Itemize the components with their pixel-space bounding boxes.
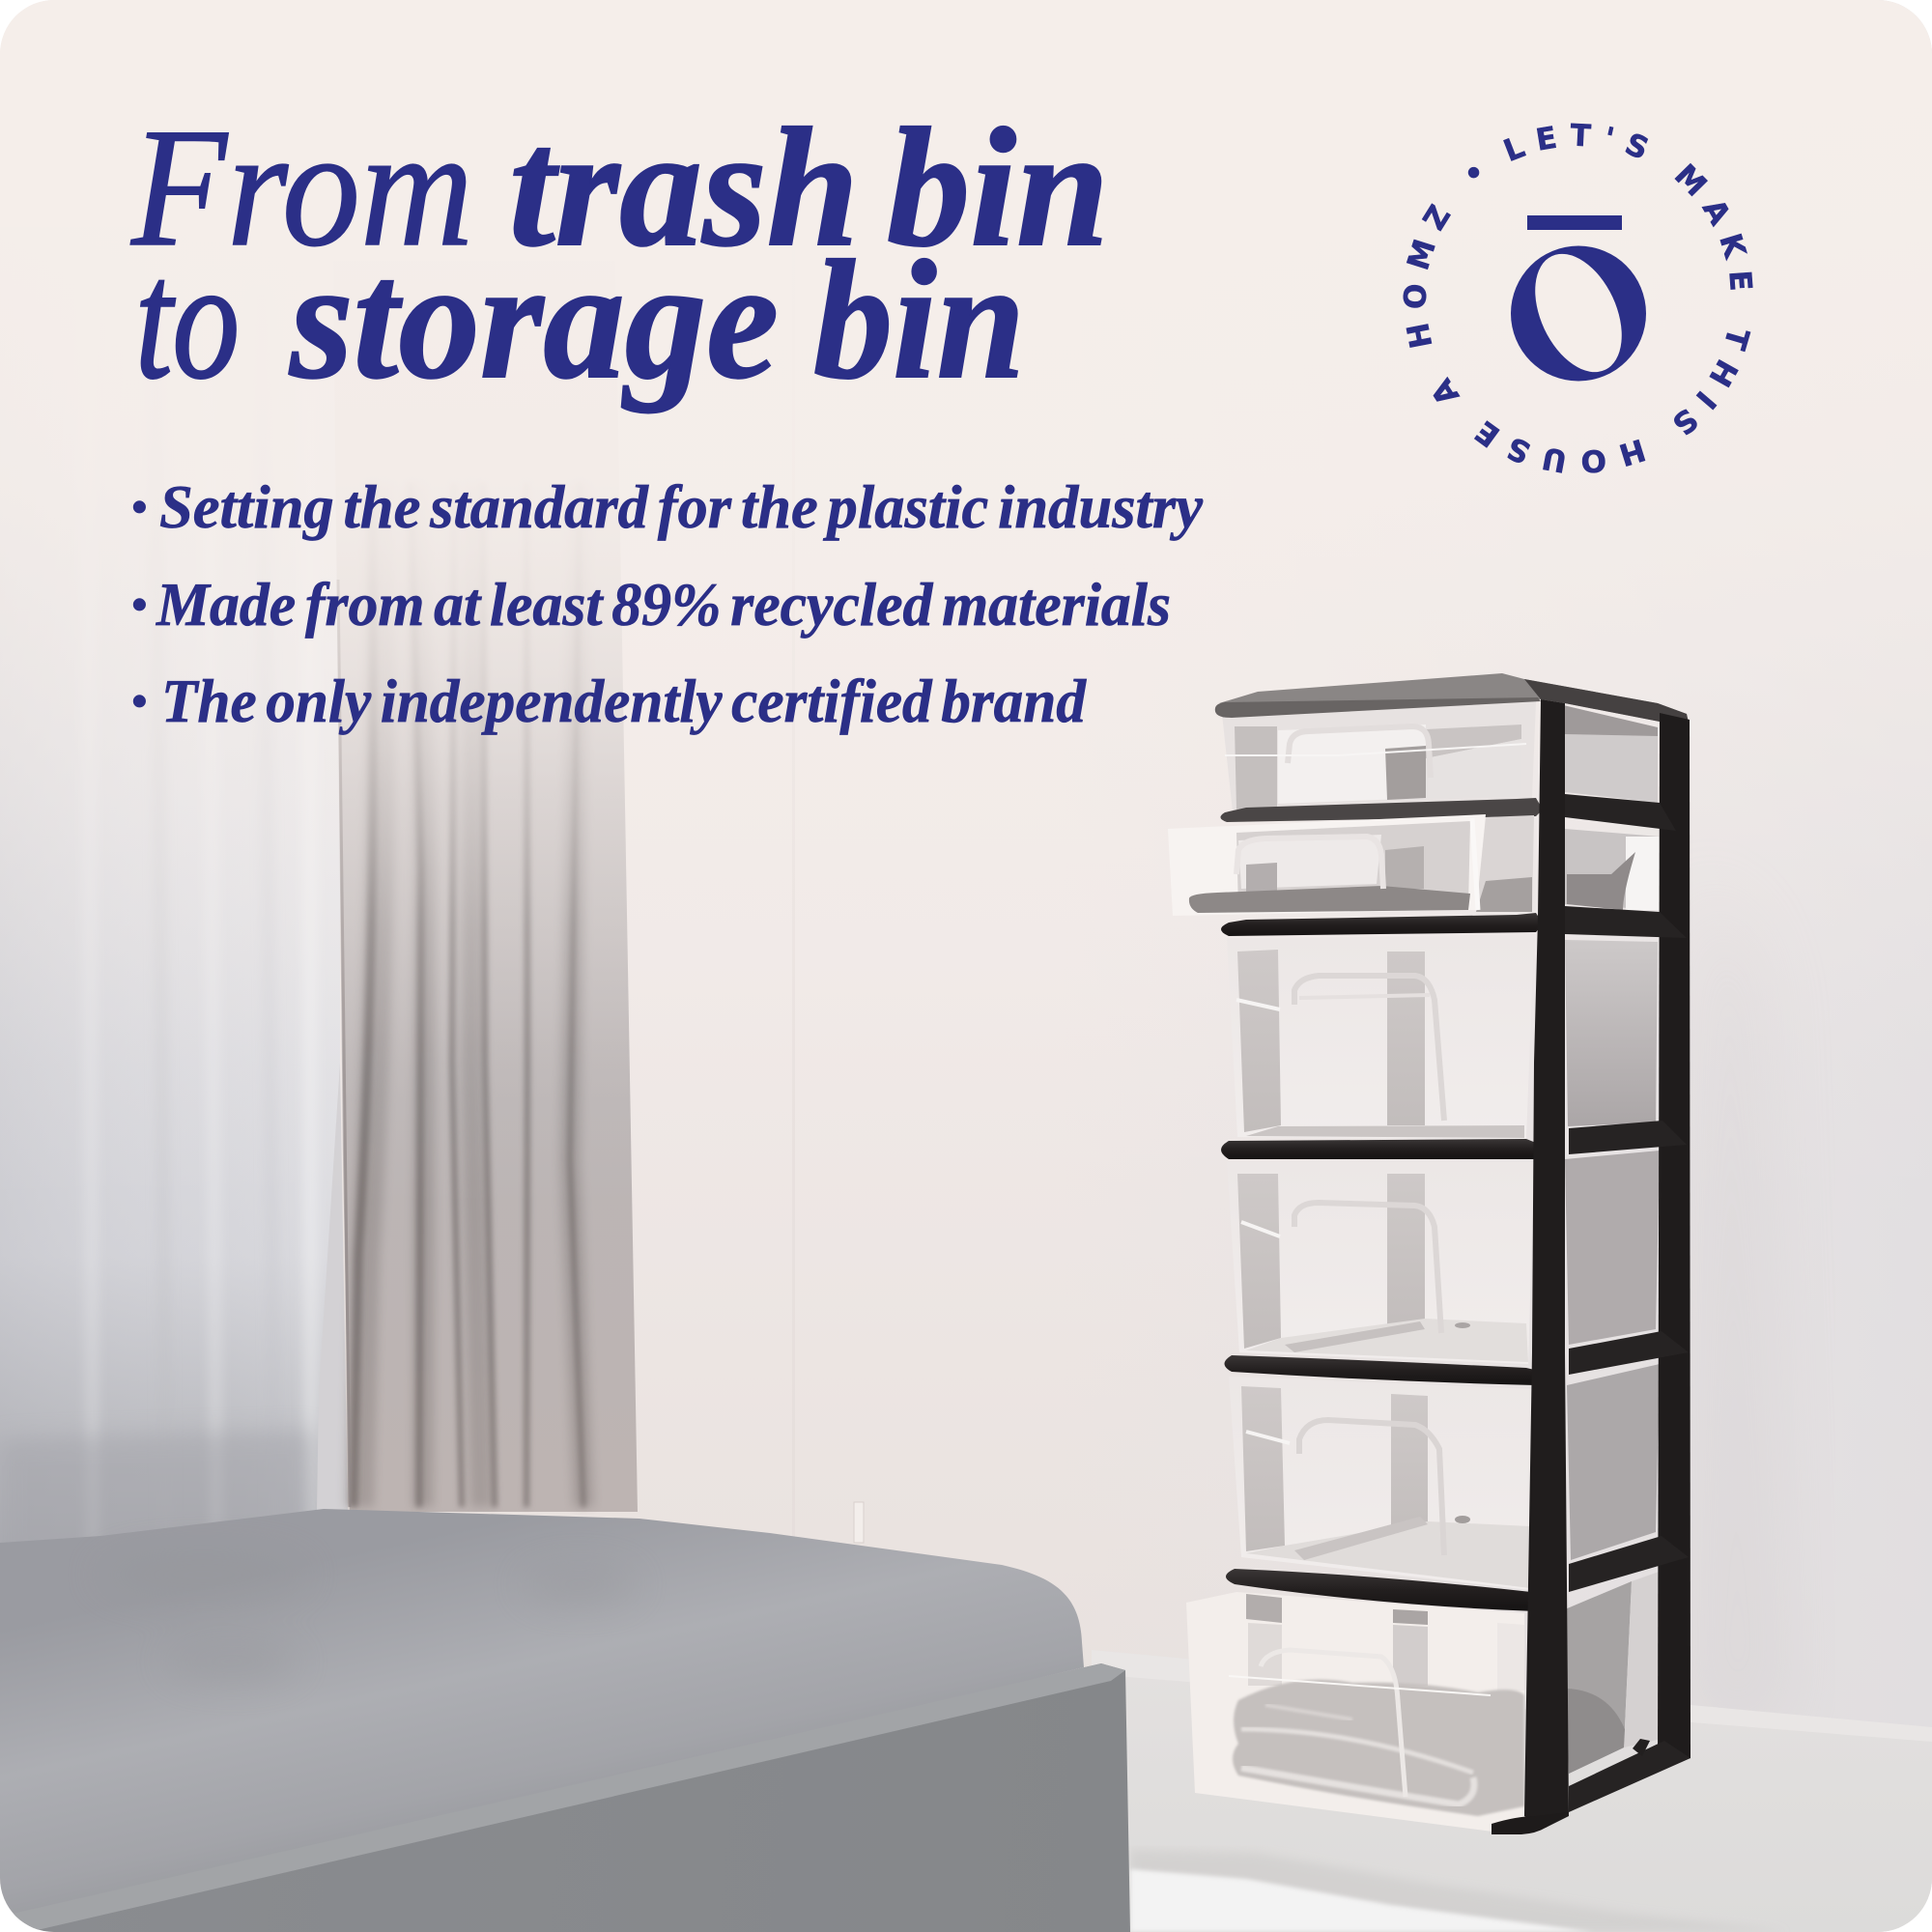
mattress <box>0 1509 1084 1922</box>
sheer white curtain <box>0 651 340 1543</box>
mattress tufts <box>97 1550 638 1679</box>
cabinet front post <box>1524 699 1569 1828</box>
title: bin <box>813 226 1025 414</box>
cabinet back post <box>1658 713 1690 1768</box>
rail under drawer 2 <box>1221 913 1543 936</box>
rail under drawer 1 <box>1220 798 1543 822</box>
drawer 4 <box>1237 1174 1530 1364</box>
circular slogan: LET'S MAKE THIS HOUSE A HOMZ • <box>1403 124 1753 473</box>
pulled-out drawer 2 <box>1168 814 1534 916</box>
bullet: certified brand: The only independently certified brand <box>161 667 1087 735</box>
top front rail <box>1215 697 1541 718</box>
title: From <box>130 94 473 282</box>
title: to <box>135 226 240 414</box>
bullet: certified brand: • <box>131 676 147 725</box>
logo bar <box>1527 215 1622 230</box>
floor with baseboard and rug <box>1128 1705 1932 1932</box>
circular badge logo <box>1403 124 1753 473</box>
cabinet top surface <box>1219 673 1689 722</box>
bed base <box>0 1663 1130 1932</box>
drawer 1 <box>1221 701 1536 811</box>
title <box>130 94 1109 414</box>
bullet list <box>131 472 1204 735</box>
logo ring <box>1511 241 1646 385</box>
rail under drawer 3 <box>1221 1139 1543 1159</box>
rail under drawer 4 <box>1225 1355 1543 1385</box>
title: trash <box>509 94 859 282</box>
folded clothes <box>1233 1680 1524 1816</box>
rail under drawer 5 <box>1226 1569 1545 1611</box>
drawer 5 <box>1229 1377 1534 1590</box>
bullet: plastic industry: Setting the standard for the plastic industry <box>159 472 1204 541</box>
drawer 3 <box>1236 950 1528 1139</box>
drawer unit <box>1168 673 1690 1834</box>
taupe curtain with folds <box>317 527 638 1513</box>
outlet on wall <box>854 1502 864 1543</box>
bullet: recycled materials: Made from at least 89% recycled materials <box>156 570 1171 639</box>
bullet: recycled materials: • <box>131 580 147 629</box>
pulled-out drawer 6 with folded clothes <box>1186 1592 1524 1832</box>
bullet: plastic industry: • <box>131 482 147 531</box>
bed <box>0 1509 1130 1932</box>
cabinet foot <box>1492 1812 1569 1834</box>
bed piping <box>0 1663 1125 1932</box>
cabinet side panels <box>1563 705 1662 1774</box>
cream wash over upper scene <box>0 0 1932 1082</box>
title: storage <box>289 226 779 414</box>
title: bin <box>887 94 1109 282</box>
cabinet side rails <box>1565 794 1690 1812</box>
